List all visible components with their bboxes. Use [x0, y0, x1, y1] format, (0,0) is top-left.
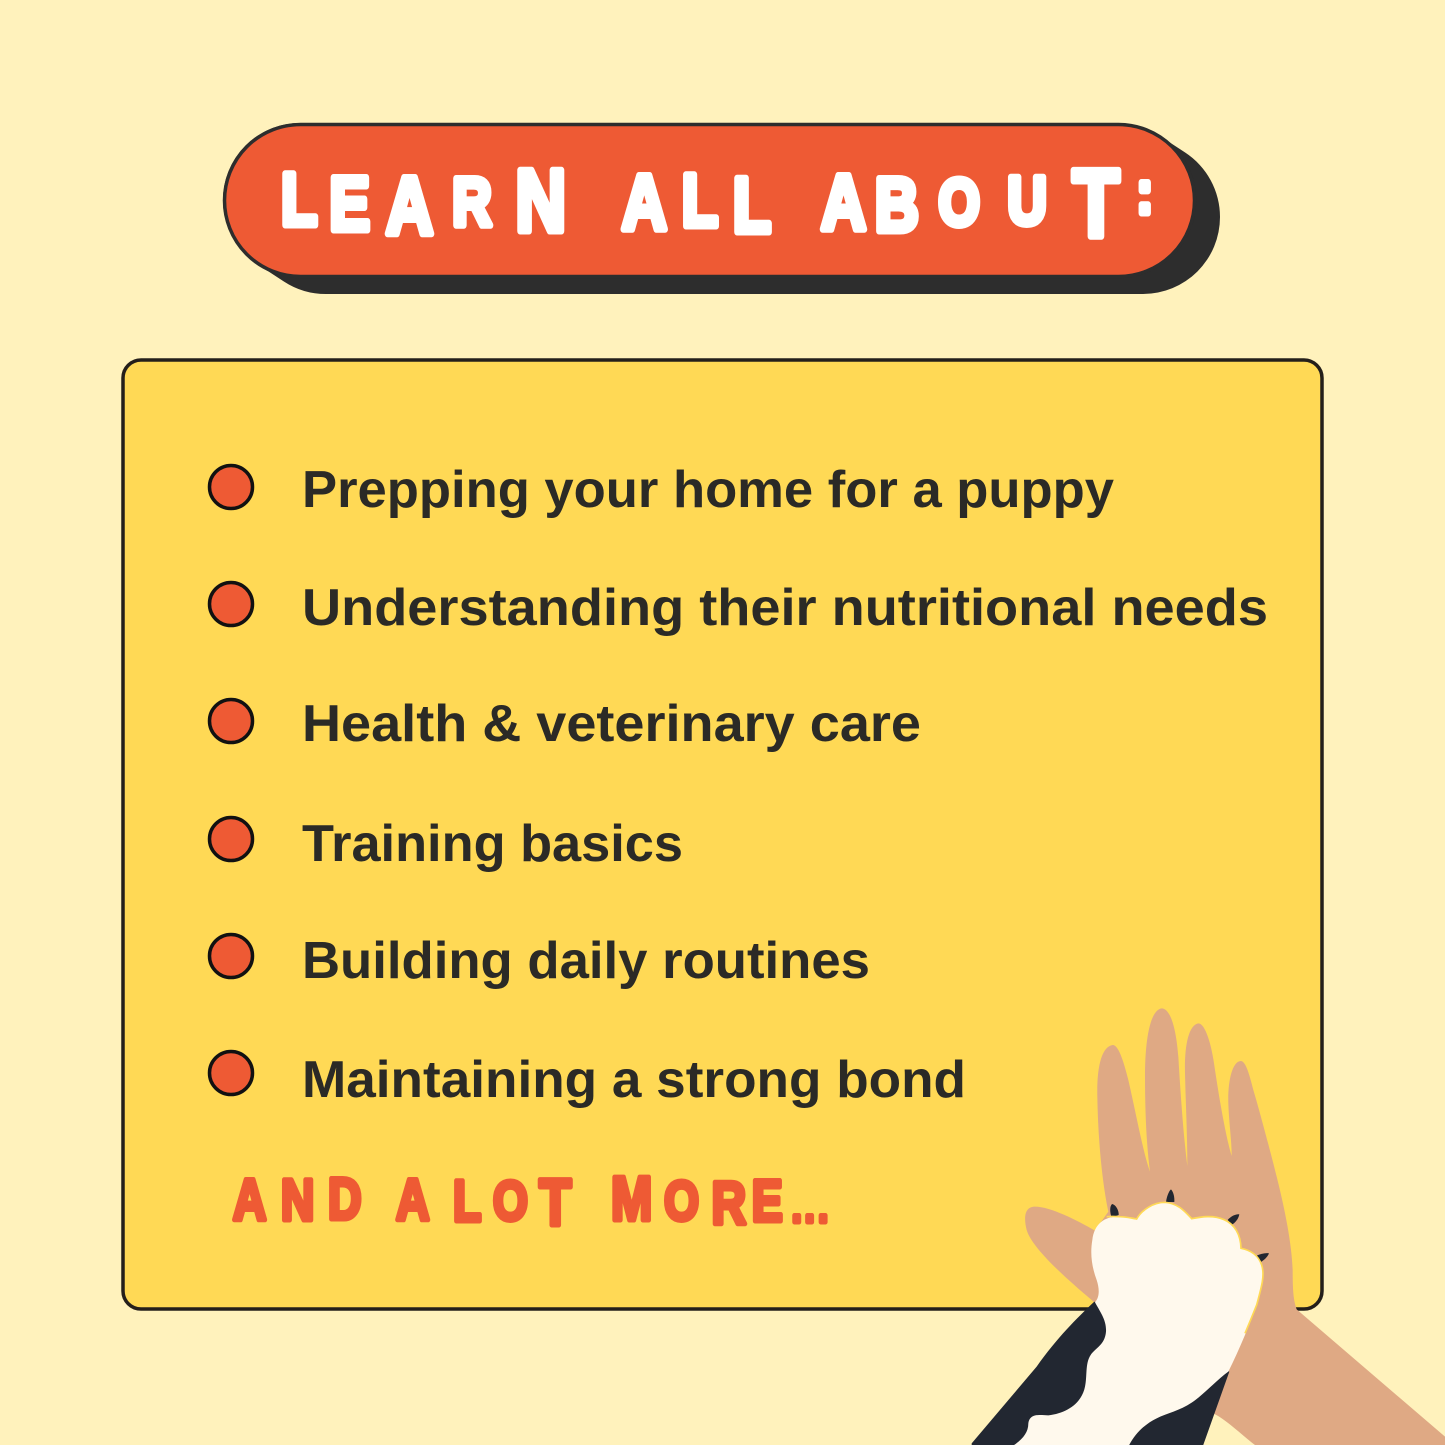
closing text: A [385, 1168, 430, 1233]
title text: O [939, 165, 980, 239]
closing text: R [711, 1170, 746, 1237]
list item: prepping [210, 461, 1114, 519]
closing text: N [281, 1168, 314, 1233]
closing text: A [233, 1168, 266, 1233]
item text: Prepping your home for a puppy [302, 461, 1114, 519]
title text: R [452, 164, 492, 240]
item text: Maintaining a strong bond [302, 1051, 966, 1109]
title text: E [329, 162, 370, 247]
paw outline [1107, 1202, 1263, 1333]
closing text: . [792, 1183, 802, 1232]
title text: A [806, 158, 866, 246]
banner shadow [300, 200, 1143, 217]
item text: Health & veterinary care [302, 695, 921, 753]
title text: L [733, 161, 771, 249]
bullet [210, 934, 252, 978]
list item: training [210, 815, 683, 873]
closing text: . [805, 1183, 814, 1232]
bullet [210, 818, 252, 860]
banner pill [224, 124, 1194, 276]
title text: U [1008, 163, 1047, 239]
human hand [1025, 1008, 1445, 1445]
bullet [210, 700, 252, 742]
item text: Understanding their nutritional needs [302, 579, 1268, 637]
closing text: O [664, 1169, 699, 1232]
item text: Training basics [302, 815, 683, 873]
closing text: O [493, 1169, 528, 1232]
item text: Building daily routines [302, 932, 870, 990]
list item: nutrition [210, 579, 1268, 637]
bullet [210, 1052, 252, 1094]
bullet [210, 582, 252, 626]
closing text: D [328, 1167, 362, 1232]
closing text: L [453, 1169, 481, 1234]
claws [1110, 1189, 1269, 1262]
illustration: hand and paw high five [972, 1008, 1445, 1445]
title text: A [386, 160, 433, 252]
title text: A [607, 158, 667, 246]
panel: topic list [123, 360, 1322, 1309]
title text: T [1073, 150, 1119, 257]
title banner [224, 124, 1194, 276]
bullet [210, 466, 252, 508]
title text: L [281, 159, 317, 242]
list item: bond [210, 1051, 966, 1109]
title text: : [1137, 159, 1153, 226]
closing text: T [539, 1165, 571, 1239]
closing text: M [597, 1164, 652, 1233]
closing text: . [818, 1183, 828, 1232]
list item: routines [210, 932, 870, 990]
closing text: E [752, 1169, 783, 1234]
list item: health [210, 695, 921, 753]
paw [1012, 1202, 1263, 1445]
sleeve markings [972, 1302, 1229, 1445]
title text: N [515, 151, 566, 250]
title text: L [682, 160, 718, 243]
title text: B [875, 163, 919, 248]
